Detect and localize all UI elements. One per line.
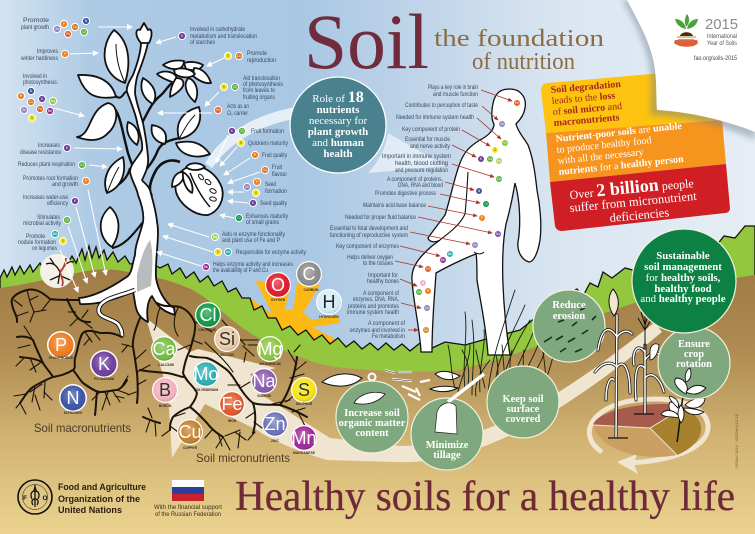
nutrient balls: oxygen, carbon, hydrogen: HYDROGEN — [319, 315, 339, 319]
plant labels: left: photosynthesis: — [23, 79, 58, 86]
plant labels: right: Helps enzyme activity and increases — [213, 261, 293, 268]
plant labels: right: Aids in enzyme functionality — [222, 231, 286, 238]
circle: reduce erosion: Reduce — [552, 300, 586, 311]
flower bud — [136, 23, 152, 43]
human body labels: A component of — [363, 290, 399, 297]
plant labels: left: Improves — [37, 48, 58, 55]
plant labels: right: and plant use of Fe and P — [222, 237, 280, 244]
corn plant — [634, 310, 669, 414]
nutrient balls: micronutrients: Cl — [200, 305, 216, 325]
message box: soil degradation, nutrient-poor soils, 2 billion: macronutrients — [553, 112, 620, 129]
nutrient role circle: plant growth — [308, 126, 368, 138]
human body labels: Key component of enzymes — [336, 243, 399, 250]
nutrient balls: micronutrients: Ca — [152, 339, 176, 359]
circle: ensure crop rotation: crop — [684, 349, 704, 360]
circle: reduce erosion — [533, 290, 605, 362]
circle: keep soil surface covered: Keep soil — [502, 394, 544, 405]
nutrient dots around plant: N — [85, 19, 88, 23]
wheat plant — [595, 289, 632, 438]
nutrient balls: micronutrients: COPPER — [183, 446, 198, 450]
circle: sustainable soil management — [632, 229, 736, 333]
plant labels: left: Promote — [26, 233, 45, 240]
nutrient dots around plant: Cl — [82, 30, 86, 34]
plant labels: left: microbial activity — [23, 220, 62, 227]
nutrient dots around plant: Fe — [38, 107, 42, 111]
plant labels: right: of small grains — [246, 219, 279, 226]
nutrient dots around plant: S — [217, 250, 219, 254]
nutrient balls: micronutrients: Na — [252, 371, 276, 391]
nodule detail circle — [40, 254, 74, 288]
message box: soil degradation, nutrient-poor soils, 2 billion — [541, 68, 730, 231]
stem body inside plant — [79, 42, 175, 322]
nutrient dots around plant: S — [240, 141, 242, 145]
nutrient balls: micronutrients: ZINC — [271, 439, 280, 443]
nutrient dots on body: Zn — [425, 306, 429, 310]
nutrient dots around plant: K — [41, 97, 44, 101]
human body labels: A component of proteins, — [387, 176, 443, 183]
nutrient dots around plant: S — [255, 191, 257, 195]
nutrient balls: micronutrients: B — [159, 380, 171, 400]
plant labels: right: O₂ carrier — [227, 110, 248, 117]
circle: increase soil organic matter content: organic matter — [339, 418, 406, 429]
nutrient role circle: Role of 18 — [312, 89, 364, 106]
circle: sustainable soil management: healthy food — [654, 283, 712, 295]
nutrient dots around plant: Cu — [29, 100, 33, 104]
nutrient dots around plant — [17, 17, 269, 271]
International Year of Soils logo: International — [707, 33, 737, 40]
nutrient balls: oxygen, carbon, hydrogen — [265, 261, 342, 319]
human body labels: Helps deliver oxygen — [347, 254, 393, 261]
nutrient dots around plant: K — [74, 199, 77, 203]
circle: ensure crop rotation: Ensure — [678, 339, 710, 350]
nutrient dots around plant: S — [227, 54, 229, 58]
circle: keep soil surface covered — [487, 366, 559, 438]
human body labels: Maintains acid-base balance — [363, 202, 426, 209]
nutrient balls: micronutrients: SULPHUR — [296, 402, 313, 406]
circle: sustainable soil management: and healthy people — [640, 293, 726, 305]
nutrient dots around plant: N — [30, 89, 33, 93]
plant labels: right: Seed quality — [260, 200, 288, 207]
nutrient balls: oxygen, carbon, hydrogen: O — [271, 275, 285, 295]
nutrient dots around plant: P — [85, 179, 87, 183]
page curl shadow — [622, 0, 755, 140]
human body labels: to the tissues — [363, 260, 393, 267]
plant labels: left: Stimulates — [37, 214, 60, 221]
message box: soil degradation, nutrient-poor soils, 2 billion: Soil degradation — [550, 79, 622, 96]
nutrient dots around plant: Cu — [237, 54, 241, 58]
nutrient dots around plant: Cl — [237, 216, 241, 220]
white root curl highlight — [99, 290, 135, 337]
nutrient dots on body: Fe — [515, 101, 519, 105]
nutrient dots around plant: P — [20, 94, 22, 98]
FAO emblem — [18, 480, 52, 514]
nutrient balls: macronutrients: P — [55, 335, 67, 355]
human body labels: functioning of reproductive system — [330, 232, 408, 239]
plant labels: right: Fruit — [272, 164, 282, 171]
plant labels: left: efficiency — [47, 200, 69, 207]
nutrient role circle — [290, 77, 386, 173]
nutrient dots on body: Mn — [441, 258, 445, 262]
arrows pointing to plant from left labels — [54, 27, 132, 292]
plant labels: right: flavour — [272, 171, 287, 178]
nutrient dots around plant: P — [256, 180, 258, 184]
bottom slogan: Healthy soils for a healthy life — [235, 474, 735, 520]
human body labels: enzymes, DNA, RNA, — [353, 296, 399, 303]
nutrient dots around plant: Cl — [65, 218, 69, 222]
nutrient dots around plant: Mg — [213, 235, 217, 239]
nutrient dots on body: Na — [496, 232, 500, 236]
human body labels: Essential to fetal development and — [330, 225, 408, 232]
plant labels: right: Seed — [265, 181, 276, 188]
plant: stem, leaves, flower and fruit — [77, 23, 223, 322]
nutrient role circle: nutrients — [317, 104, 360, 116]
plant labels: right: Fruit formation — [251, 128, 284, 135]
human body labels: A component of — [368, 320, 405, 327]
nutrient dots on body: Zn — [473, 243, 477, 247]
circle: keep soil surface covered: covered — [506, 414, 541, 425]
soy plant — [661, 392, 705, 442]
nutrient dots around plant: Cl — [80, 163, 84, 167]
plant labels: right: of starches — [190, 39, 215, 46]
nutrient dots around plant: Cl — [233, 85, 237, 89]
nutrient balls: macronutrients: K — [98, 354, 110, 374]
nutrient dots around plant: P — [254, 153, 256, 157]
nutrient dots around plant: Mg — [51, 99, 55, 103]
plant labels: left: Promote — [23, 17, 50, 24]
circle: reduce erosion: erosion — [553, 311, 585, 322]
cream arrow band in soil — [146, 318, 662, 462]
message box: soil degradation, nutrient-poor soils, 2 billion: with all the necessary — [557, 147, 644, 167]
nutrient dots around plant: Mn — [48, 109, 52, 113]
human body labels: immune system health — [347, 309, 399, 316]
roots: micronutrient side — [140, 303, 307, 450]
nutrient balls: micronutrients: S — [298, 380, 310, 400]
nutrient role circle: necessary for — [309, 115, 367, 127]
human body labels: Plays a key role in brain — [428, 84, 478, 91]
nutrient dots on body: Cl — [503, 141, 507, 145]
plant labels: right: Enhances maturity — [246, 213, 289, 220]
message box: soil degradation, nutrient-poor soils, 2 billion: deficiencies — [609, 205, 670, 225]
circle: sustainable soil management: Sustainable — [656, 250, 710, 262]
nutrient balls: micronutrients: IRON — [228, 419, 237, 423]
nutrient dots on body: P — [427, 289, 429, 293]
plant labels: right: of photosynthesis — [243, 81, 283, 88]
nutrient dots around plant: Zn — [22, 108, 26, 112]
nutrient dots on body: Fe — [426, 267, 430, 271]
white swoosh from nutrient circle to plant — [205, 107, 300, 168]
FAO name — [58, 482, 146, 515]
human body silhouette — [412, 89, 541, 355]
International Year of Soils logo: Year of Soils — [707, 40, 737, 47]
plant labels: right: the availability of P and Cu — [213, 267, 268, 274]
heading: Soil: Soil — [304, 0, 429, 85]
circle: increase soil organic matter content — [336, 381, 408, 453]
human body labels: health, blood clotting — [395, 160, 449, 167]
financial support text: With the financial support — [154, 504, 222, 511]
circle: minimize tillage with hoe: tillage — [433, 450, 461, 461]
human body labels: healthy bones — [367, 278, 399, 285]
plant labels: right: metabolism and translocation — [190, 33, 257, 40]
human body labels: Contributes to perception of taste — [405, 102, 478, 109]
human body labels: and nerve activity — [410, 143, 451, 150]
plant labels: right: Promote — [247, 50, 267, 57]
FAO name: United Nations — [58, 505, 122, 515]
nutrient dots around plant: S — [223, 85, 225, 89]
message box: soil degradation, nutrient-poor soils, 2 billion: of soil micro and — [552, 101, 623, 118]
plant labels: left — [18, 17, 78, 252]
circle: minimize tillage with hoe: Minimize — [426, 440, 469, 451]
International Year of Soils logo — [674, 14, 738, 62]
plant labels: left: disease resistance — [20, 149, 61, 156]
message box: soil degradation, nutrient-poor soils, 2 billion: to produce healthy food — [556, 135, 652, 156]
financial support text — [154, 504, 222, 518]
nutrient balls: micronutrients: Mn — [291, 428, 317, 448]
heading: the foundation of nutrition: of nutrition — [472, 49, 575, 75]
circle: ensure crop rotation — [658, 327, 730, 399]
message box: soil degradation, nutrient-poor soils, 2 billion: leads to the loss — [551, 90, 616, 107]
plant labels: right: Involved in carbohydrate — [190, 26, 245, 33]
plant labels: left: on legumes — [32, 245, 57, 252]
stem shadow — [137, 240, 152, 292]
FAO name: Organization of the — [58, 494, 140, 504]
nutrient balls: micronutrients — [151, 302, 317, 455]
nutrient balls: micronutrients: SODIUM — [257, 394, 271, 398]
arrows pointing to plant from right labels — [156, 37, 260, 266]
plant labels: left: plant growth — [21, 24, 49, 31]
International Year of Soils logo: 2015 — [705, 16, 738, 33]
message box: soil degradation, nutrient-poor soils, 2 billion: suffer from micronutrient — [569, 189, 698, 215]
circle: ensure crop rotation: rotation — [676, 359, 712, 370]
human body labels: Essential for muscle — [405, 136, 450, 143]
nutrient dots around plant: K — [231, 129, 234, 133]
message box: soil degradation, nutrient-poor soils, 2 billion: Nutrient-poor soils are unable — [555, 121, 683, 145]
plant labels: left: Involved in — [23, 73, 47, 80]
nutrient balls: macronutrients: POTASSIUM — [94, 377, 114, 381]
white root curl — [99, 290, 135, 337]
circle: sustainable soil management: for healthy soils, — [646, 272, 721, 284]
nutrient dots around plant: Fe — [216, 108, 220, 112]
nutrient balls: micronutrients: Cu — [178, 422, 202, 442]
FAO emblem: O — [42, 495, 48, 502]
page curl — [627, 0, 755, 132]
nutrient dots around plant: P — [64, 52, 66, 56]
nutrient balls: macronutrients — [47, 331, 118, 415]
nutrient dots around plant: Zn — [245, 185, 249, 189]
human body labels: Needed for proper fluid balance — [345, 214, 416, 221]
nutrient dots around plant: K — [252, 201, 255, 205]
circle: minimize tillage with hoe — [411, 374, 484, 470]
nutrient balls: oxygen, carbon, hydrogen: OXYGEN — [271, 298, 286, 302]
nutrient dots around plant: Mo — [226, 250, 230, 254]
plant labels: left: nodule formation — [18, 239, 56, 246]
nutrient dots around plant: Cu — [263, 168, 267, 172]
heading: the foundation of nutrition — [434, 26, 604, 75]
circle: increase soil organic matter content: Increase soil — [344, 408, 400, 419]
financial support text: of the Russian Federation — [155, 511, 222, 518]
nutrient dots around plant: S — [31, 116, 33, 120]
human body labels: enzymes and involved in — [350, 327, 405, 334]
nutrient dots around plant: Cu — [73, 25, 77, 29]
roots: macronutrient side — [12, 289, 150, 415]
plant labels: right: Acts as an — [227, 103, 249, 110]
fruit — [172, 163, 223, 215]
plant labels: right: Aid translocation — [243, 75, 280, 82]
nutrient dots on body: B — [422, 281, 424, 285]
nutrient balls: micronutrients: Mg — [257, 339, 283, 359]
Russian flag — [172, 480, 204, 501]
plant labels: right — [190, 26, 307, 274]
plant labels: left: Promotes root formation — [23, 175, 78, 182]
human body labels — [330, 84, 478, 340]
plant labels: right: from leaves to — [243, 87, 275, 94]
nutrient balls: micronutrients: MOLYBDENUM — [194, 388, 218, 392]
nutrient balls: micronutrients: MAGNESIUM — [259, 362, 281, 366]
human body labels: Important in immune system — [382, 153, 451, 160]
nutrient dots on body: Cu — [424, 328, 428, 332]
nutrient dots on body: Ca — [497, 177, 501, 181]
plant labels: right: Fruit quality — [262, 152, 288, 159]
plant labels: right: reproduction — [247, 57, 276, 64]
nutrient dots on body: Cl — [484, 202, 488, 206]
nutrient role circle: health — [323, 148, 353, 160]
human body labels: Promotes digestive process — [375, 190, 436, 197]
nutrient balls: micronutrients: BORON — [159, 404, 172, 408]
heading: soil macronutrients: Soil macronutrients — [34, 421, 131, 435]
nutrient balls: oxygen, carbon, hydrogen: CARBON — [304, 288, 319, 292]
nutrient dots on body: Ca — [417, 290, 421, 294]
circle: increase soil organic matter content: content — [355, 428, 389, 439]
plant labels: left: and growth — [52, 181, 78, 188]
crops: wheat, corn and soy plants — [595, 289, 705, 442]
nutrient dots on body: Ca — [488, 157, 492, 161]
nutrient balls: macronutrients: PHOSPHORUS — [49, 356, 74, 360]
circle: sustainable soil management: soil management — [644, 261, 722, 273]
heading: soil micronutrients: Soil micronutrients — [196, 451, 290, 465]
human body labels: proteins and promotes — [348, 303, 399, 310]
plant labels: left: winter hardiness — [20, 55, 58, 62]
nutrient balls: oxygen, carbon, hydrogen: C — [302, 264, 316, 284]
circle: keep soil surface covered: surface — [507, 404, 540, 415]
message box: soil degradation, nutrient-poor soils, 2 billion: Over 2 billion people — [568, 171, 694, 203]
nutrient dots around plant: Fe — [66, 32, 70, 36]
plant labels: left: Reduces plant respiration — [18, 161, 75, 168]
nutrient balls: macronutrients: N — [66, 388, 80, 408]
nutrient dots around plant: P — [63, 22, 65, 26]
nutrient balls: micronutrients: MANGANESE — [293, 451, 316, 455]
human body labels: Important for — [368, 272, 398, 279]
nutrient balls: micronutrients: Fe — [221, 394, 243, 414]
leaves — [77, 30, 210, 247]
nutrient balls: oxygen, carbon, hydrogen: H — [322, 292, 336, 312]
grass band — [0, 226, 755, 400]
human body arrows — [395, 90, 512, 330]
tall grass tufts — [448, 290, 556, 396]
nutrient dots on body: K — [480, 157, 483, 161]
plant labels: right: Quickens maturity — [248, 140, 289, 147]
nutrient dots around plant: Mn — [204, 265, 208, 269]
nutrient balls: micronutrients: CHLORINE — [198, 328, 217, 332]
human body labels: DNA, RNA and blood — [398, 182, 443, 189]
nutrient balls: macronutrients: NITROGEN — [64, 411, 82, 415]
yellow star behind O, C and H — [243, 280, 347, 350]
plant labels: right: formation — [265, 188, 287, 195]
human body labels: Needed for immune system health — [396, 114, 474, 121]
human body labels: Key component of protein — [402, 126, 460, 133]
organic matter leaf litter — [322, 370, 460, 400]
flower petals — [157, 60, 211, 102]
FAO name: Food and Agriculture — [58, 482, 146, 492]
nutrient dots on body — [416, 100, 520, 334]
FAO emblem: F — [23, 495, 27, 502]
nutrient dots on body: P — [481, 216, 483, 220]
International Year of Soils logo: fao.org/soils-2015 — [694, 55, 737, 62]
nutrient dots around plant: Cl — [240, 129, 244, 133]
nutrient balls: micronutrients: Zn — [264, 414, 286, 434]
nutrient dots on body: N — [478, 189, 481, 193]
nutrient dots around plant: Zn — [55, 27, 59, 31]
plant labels: right: fruiting organs — [243, 94, 275, 101]
nutrient dots around plant: K — [181, 34, 184, 38]
white wedge from nutrient circle to human — [368, 133, 445, 173]
message box: soil degradation, nutrient-poor soils, 2 billion: nutrients for a healthy person — [558, 154, 685, 178]
nutrient dots around plant: Mo — [53, 232, 57, 236]
crop rotation diagram — [589, 399, 708, 474]
human body labels: and pressure regulation — [395, 167, 448, 174]
human body labels: Fe metabolism — [372, 333, 405, 340]
nutrient dots around plant: K — [66, 146, 69, 150]
nutrient balls: micronutrients: Si — [219, 329, 235, 349]
nutrient dots on body: Mo — [448, 252, 452, 256]
nutrient balls: micronutrients: SILICON — [220, 353, 234, 357]
plant labels: left: Increases — [38, 142, 60, 149]
nutrient dots around plant: S — [62, 239, 64, 243]
human body labels: and muscle function — [433, 91, 478, 98]
plant labels: left: Increases water-use — [23, 194, 68, 201]
heading: the foundation of nutrition: the foundation — [434, 26, 604, 52]
nutrient balls: micronutrients: CALCIUM — [158, 363, 174, 367]
nutrient dots on body: Mg — [497, 159, 501, 163]
nutrient dots on body: S — [494, 148, 496, 152]
nutrient dots on body: Zn — [500, 122, 504, 126]
nutrient role circle: and human — [312, 137, 364, 149]
nutrient balls: micronutrients: Mo — [193, 364, 219, 384]
plant labels: right: Responsible for enzyme activity — [236, 249, 307, 256]
soil ground — [0, 270, 755, 534]
FAO emblem: A — [33, 487, 38, 493]
print code: GRMU 2015 · I4225e/1/12.15 — [734, 413, 739, 468]
